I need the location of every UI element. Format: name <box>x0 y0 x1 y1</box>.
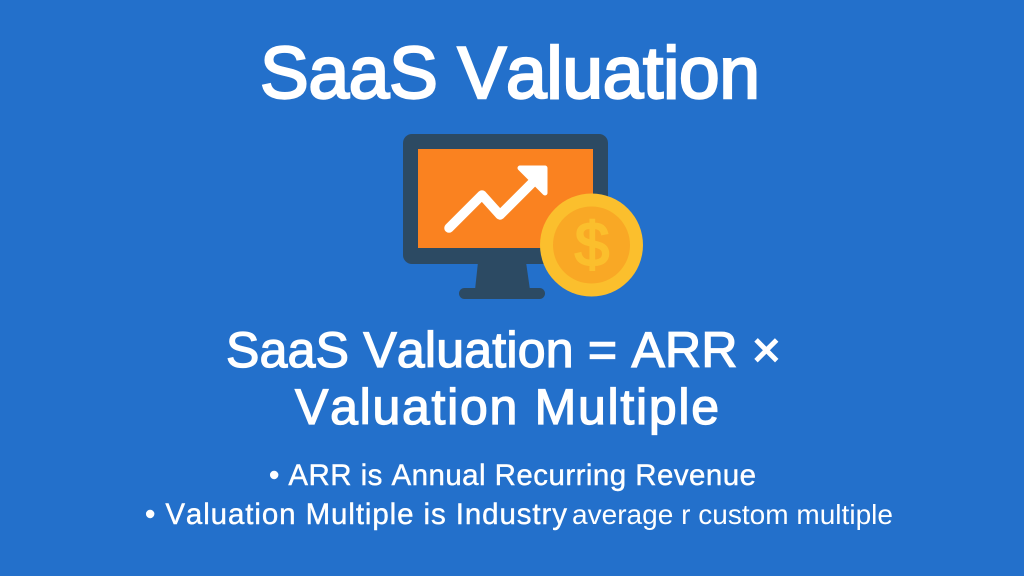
definition: valuation multiple <box>145 498 893 531</box>
dollar coin <box>540 194 643 296</box>
monitor stand <box>475 262 530 290</box>
monitor screen <box>418 149 593 248</box>
title: SaaS Valuation <box>260 33 760 114</box>
dollar coin: $ <box>575 211 609 280</box>
definitions list <box>145 459 893 531</box>
formula heading <box>226 322 781 435</box>
monitor frame <box>403 134 608 264</box>
formula heading: Valuation Multiple <box>295 379 719 435</box>
icon: monitor with growth chart and coin <box>403 134 643 299</box>
growth arrow <box>449 168 545 228</box>
definition: valuation multiple: average r custom multiple <box>572 499 893 530</box>
formula heading: SaaS Valuation = ARR × <box>226 322 781 378</box>
definition: ARR: • ARR is Annual Recurring Revenue <box>269 459 756 492</box>
monitor base <box>459 288 545 299</box>
definition: valuation multiple: • Valuation Multiple is Industry <box>145 498 567 531</box>
